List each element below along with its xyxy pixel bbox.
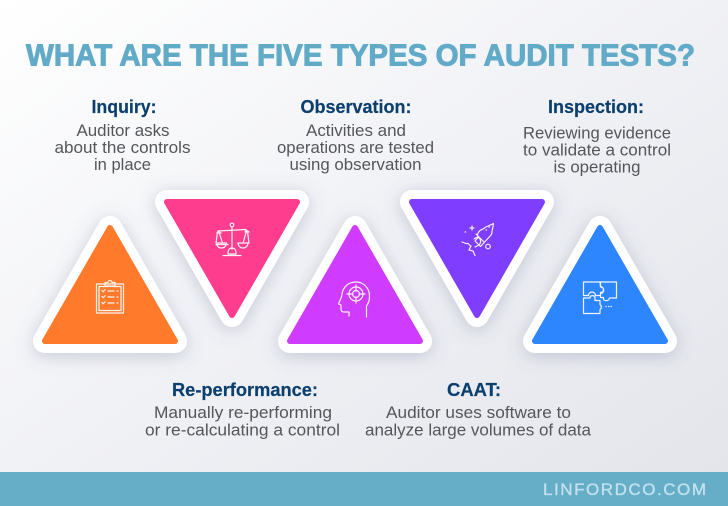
text block: re-performance: or re-calculating a control xyxy=(145,422,340,440)
panel: violet triangle xyxy=(412,202,542,315)
footer url: LINFORDCO.COM xyxy=(543,480,706,499)
text block: re-performance xyxy=(145,379,340,440)
text block: inspection: to validate a control xyxy=(523,142,671,160)
text block: observation xyxy=(277,96,434,174)
text block: CAAT: analyze large volumes of data xyxy=(365,422,592,440)
text block: inspection: Reviewing evidence xyxy=(523,124,671,142)
panel: magenta triangle xyxy=(290,228,420,341)
icon: puzzle pieces xyxy=(584,282,616,314)
text block: observation: Observation: xyxy=(300,96,412,117)
title: WHAT ARE THE FIVE TYPES OF AUDIT TESTS? xyxy=(26,38,695,72)
icon: head with target xyxy=(338,282,370,317)
icon: balance scales xyxy=(216,223,249,256)
text block: inquiry: Auditor asks xyxy=(76,122,170,140)
text block: re-performance: Re-performance: xyxy=(172,379,318,400)
text block: observation: Activities and xyxy=(306,122,406,140)
panel: pink triangle xyxy=(167,202,297,315)
text block: inquiry: Inquiry: xyxy=(92,96,156,117)
footer bar xyxy=(0,472,728,506)
text block: inspection xyxy=(523,96,671,176)
icon: clipboard checklist xyxy=(96,280,124,313)
panel: orange triangle xyxy=(45,228,175,341)
text block: CAAT: CAAT: xyxy=(447,379,501,400)
text block: inspection: Inspection: xyxy=(548,96,644,117)
panel: blue triangle xyxy=(535,228,665,341)
text block: CAAT: Auditor uses software to xyxy=(386,404,571,422)
text block: inquiry: in place xyxy=(94,156,151,174)
text block: CAAT xyxy=(365,379,592,440)
text block: inspection: is operating xyxy=(554,158,640,176)
text block: observation: using observation xyxy=(290,156,422,174)
text block: re-performance: Manually re-performing xyxy=(154,404,332,422)
text block: inquiry: about the controls xyxy=(54,139,190,157)
icon: rocket xyxy=(462,224,494,256)
text block: observation: operations are tested xyxy=(277,139,434,157)
text block: inquiry xyxy=(54,96,190,174)
